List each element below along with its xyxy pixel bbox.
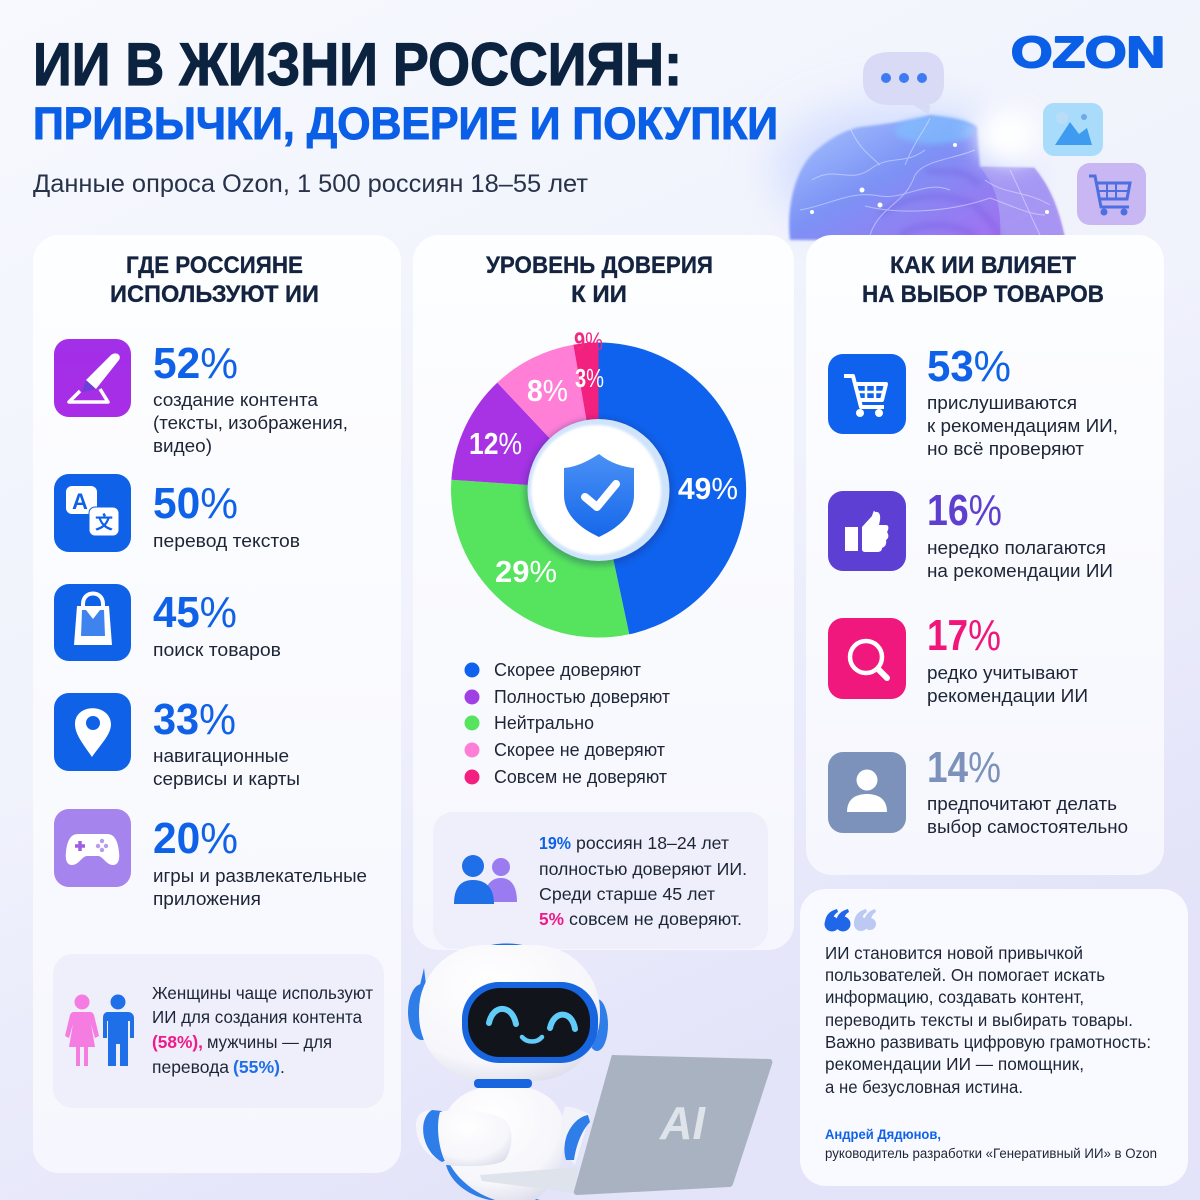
icon: translate: 文: [95, 509, 113, 535]
callout text: (55%): [233, 1057, 280, 1077]
quote text: рекомендации ИИ — помощник,: [825, 1054, 1084, 1074]
icon: cart: [828, 354, 906, 434]
icon: translate: A: [72, 489, 88, 514]
stat: 14%: 14%: [927, 743, 1001, 792]
icon: picture: [1043, 103, 1103, 156]
quote text: пользователей. Он помогает искать: [825, 965, 1105, 985]
stat: 20%: 20%: [153, 814, 238, 863]
icon: person: [828, 752, 906, 833]
stat: 16%: [927, 486, 1113, 581]
icon: quotation marks: [824, 909, 876, 932]
donut chart: 9%: [574, 328, 603, 356]
icon: woman and man: [65, 994, 134, 1066]
callout text: россиян 18–24 лет: [576, 833, 729, 853]
donut chart: 12%: [469, 426, 522, 461]
donut chart: 3%: [575, 363, 604, 393]
icon: map pin: [54, 693, 131, 771]
legend: Скорее не доверяют: [494, 740, 665, 760]
stat: 20%: игры и развлекательные: [153, 866, 367, 886]
heading: [486, 252, 713, 308]
quote text: а не безусловная истина.: [825, 1077, 1023, 1097]
stat: 14%: предпочитают делать: [927, 794, 1117, 814]
icon: chat bubble: [863, 52, 944, 115]
stat: 45%: поиск товаров: [153, 640, 281, 660]
stat: 52%: 52%: [153, 339, 238, 388]
laptop: AI: [659, 1097, 706, 1149]
icon: magnifier: [828, 618, 906, 699]
stat: 16%: нередко полагаются: [927, 538, 1106, 558]
legend: Скорее доверяют: [494, 660, 641, 680]
stat: 14%: выбор самостоятельно: [927, 817, 1128, 837]
panel: where Russians use AI: [33, 235, 401, 1173]
callout text: 19%: [539, 833, 571, 853]
callout text: Женщины чаще используют: [152, 983, 373, 1003]
stat: 17%: [927, 611, 1088, 706]
icon: thumbs up: [828, 491, 906, 571]
quote text: [825, 943, 1151, 1097]
stat: 16%: на рекомендации ИИ: [927, 561, 1113, 581]
stat: 50%: [153, 479, 300, 551]
stat: 17%: рекомендации ИИ: [927, 686, 1088, 706]
icon: gamepad: [54, 809, 131, 887]
callout: age groups: [433, 812, 768, 949]
callout text: мужчины — для: [207, 1032, 332, 1052]
stat: 17%: редко учитывают: [927, 663, 1078, 683]
illustration: robot with laptop: [408, 943, 772, 1200]
stat: 33%: сервисы и карты: [153, 769, 300, 789]
heading: [862, 252, 1104, 308]
stat: 16%: 16%: [927, 486, 1002, 535]
icon: cart: [1077, 163, 1146, 225]
quote text: Важно развивать цифровую грамотность:: [825, 1032, 1151, 1052]
donut chart: 8%: [527, 373, 568, 408]
heading: ИСПОЛЬЗУЮТ ИИ: [110, 281, 319, 308]
callout text: [539, 833, 747, 929]
stat: 33%: 33%: [153, 695, 236, 744]
stat: 53%: к рекомендациям ИИ,: [927, 416, 1118, 436]
stat: 52%: видео): [153, 436, 212, 456]
callout: women and men: [53, 954, 384, 1108]
heading: [110, 252, 319, 308]
icon: pen: [54, 339, 131, 417]
stat: 50%: перевод текстов: [153, 531, 300, 551]
donut chart: [451, 328, 746, 638]
stat: 52%: создание контента: [153, 390, 319, 410]
stat: 20%: [153, 814, 367, 909]
legend: Совсем не доверяют: [494, 767, 667, 787]
title: [33, 31, 778, 149]
subtitle: Данные опроса Ozon, 1 500 россиян 18–55 лет: [33, 170, 589, 198]
legend: Нейтрально: [494, 713, 594, 733]
callout text: полностью доверяют ИИ.: [539, 859, 747, 879]
callout text: (58%),: [152, 1032, 203, 1052]
quote text: информацию, создавать контент,: [825, 987, 1084, 1007]
panel: trust level: [413, 235, 794, 950]
callout text: .: [280, 1057, 285, 1077]
callout text: Среди старше 45 лет: [539, 884, 715, 904]
stat: 52%: [153, 339, 348, 456]
legend: Полностью доверяют: [494, 687, 670, 707]
quote text: переводить тексты и выбирать товары.: [825, 1010, 1133, 1030]
stat: 33%: навигационные: [153, 746, 289, 766]
callout text: ИИ для создания контента: [152, 1007, 362, 1027]
heading: КАК ИИ ВЛИЯЕТ: [890, 252, 1076, 279]
heading: УРОВЕНЬ ДОВЕРИЯ: [486, 252, 713, 279]
quote author: [825, 1127, 1157, 1161]
icon: translate: [54, 474, 131, 552]
panel: expert quote: [800, 889, 1188, 1186]
callout text: 5%: [539, 909, 564, 929]
donut chart: 49%: [678, 471, 738, 506]
stat: 14%: [927, 743, 1128, 837]
icon: shield: [564, 454, 634, 537]
callout text: [152, 983, 373, 1077]
stat: 20%: приложения: [153, 889, 261, 909]
illustration: glowing brain with floating icons: [775, 52, 1146, 240]
stat: 52%: (тексты, изображения,: [153, 413, 348, 433]
quote author: руководитель разработки «Генеративный ИИ» в Ozon: [825, 1146, 1157, 1161]
stat: 53%: но всё проверяют: [927, 439, 1084, 459]
stat: 53%: [927, 342, 1118, 459]
heading: НА ВЫБОР ТОВАРОВ: [862, 281, 1104, 308]
stat: 53%: прислушиваются: [927, 393, 1077, 413]
panel: AI influence on product choice: [806, 235, 1164, 875]
icon: people: [454, 855, 517, 904]
title: ИИ В ЖИЗНИ РОССИЯН:: [33, 31, 682, 98]
title: ПРИВЫЧКИ, ДОВЕРИЕ И ПОКУПКИ: [33, 98, 778, 149]
callout text: совсем не доверяют.: [569, 909, 742, 929]
stat: 17%: 17%: [927, 611, 1001, 660]
logo: OZON: OZON: [1011, 28, 1165, 77]
icon: shopping bag: [54, 584, 131, 661]
stat: 45%: [153, 588, 281, 660]
heading: ГДЕ РОССИЯНЕ: [126, 252, 303, 279]
stat: 45%: 45%: [153, 588, 237, 637]
callout text: перевода: [152, 1057, 229, 1077]
heading: К ИИ: [571, 281, 627, 308]
legend: [464, 660, 670, 787]
quote author: Андрей Дядюнов,: [825, 1127, 941, 1142]
donut chart: 29%: [495, 554, 557, 589]
stat: 50%: 50%: [153, 479, 238, 528]
laptop: [480, 1055, 772, 1195]
quote text: ИИ становится новой привычкой: [825, 943, 1083, 963]
stat: 53%: 53%: [927, 342, 1011, 391]
stat: 33%: [153, 695, 300, 789]
